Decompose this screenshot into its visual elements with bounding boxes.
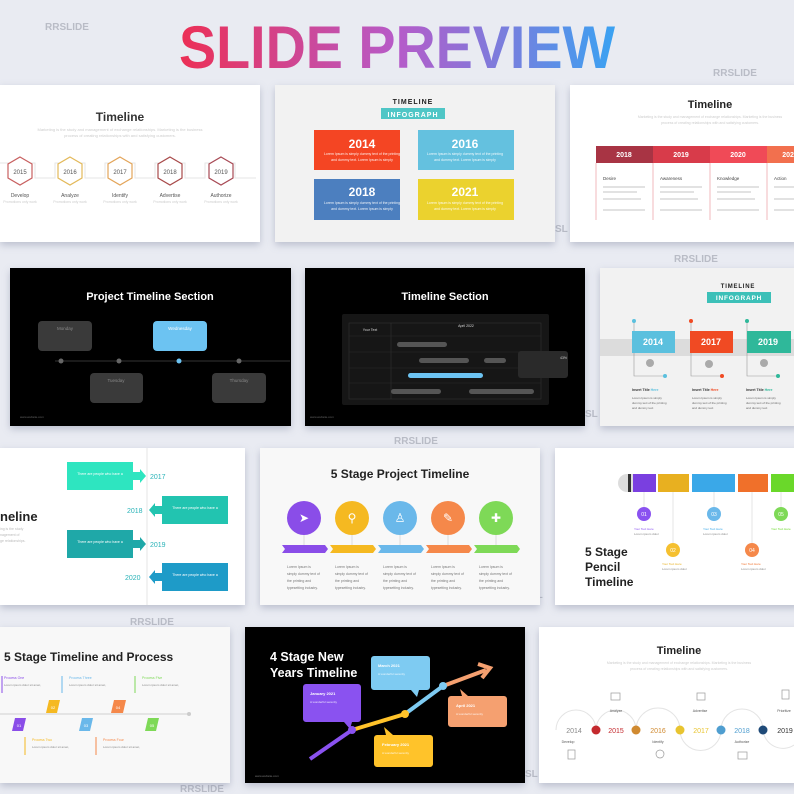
slide 2: colored year boxes: and dummy text. Lorem Ipsum is simply <box>331 158 393 162</box>
slide 8: 5 stage project timeline: ✎ <box>443 511 453 525</box>
slide 11: 4 stage new years timeline (dark): April 2021 <box>456 703 476 708</box>
slide 10: 5 stage timeline and process: Process Four <box>103 738 125 742</box>
slide 6: infograph with pins: 2017 <box>701 337 721 347</box>
slide 12: wave timeline: 2016 <box>650 728 666 735</box>
slide 10: 5 stage timeline and process: Process One <box>4 676 24 680</box>
slide 5: gantt timeline section (dark) <box>305 268 585 426</box>
watermarks: SL <box>585 409 598 420</box>
slide 1: hexagon timeline: 2019 <box>214 170 228 176</box>
slide 8: 5 stage project timeline: the printing and <box>479 579 503 583</box>
slide 10: 5 stage timeline and process <box>0 627 230 783</box>
slide 3: table timeline: Desire <box>603 176 617 181</box>
slide 1: hexagon timeline: Promotions only work <box>204 200 238 204</box>
slide 1: hexagon timeline: Promotions only work <box>3 200 37 204</box>
slide 10: 5 stage timeline and process: Process Five <box>142 676 162 680</box>
slide 12: wave timeline: process of creating relationships with and satisfying customers. <box>630 667 728 671</box>
slide 4: project timeline section (dark): Project Timeline Section <box>86 291 214 303</box>
slide 6: infograph with pins: TIMELINE <box>721 284 755 290</box>
slide 10: 5 stage timeline and process: 03 <box>84 723 89 728</box>
slide 8: 5 stage project timeline: simply dummy text of <box>479 572 512 576</box>
slide 8: 5 stage project timeline: the printing and <box>431 579 455 583</box>
slide 12: wave timeline: Prioritize <box>777 709 791 713</box>
slide 10: 5 stage timeline and process: Lorem ipsum dolor sit amet, <box>32 745 69 749</box>
slide 2: colored year boxes: Lorem Ipsum is simply dummy text of the printing <box>427 152 503 156</box>
watermarks: RRSLIDE <box>674 254 718 265</box>
slide 8: 5 stage project timeline: typesetting industry. <box>383 586 414 590</box>
slide 11: 4 stage new years timeline (dark): A wonderful serenity <box>310 700 338 704</box>
slide 11: 4 stage new years timeline (dark): A wonderful serenity <box>382 751 410 755</box>
slide 2: colored year boxes: 2018 <box>349 185 376 199</box>
slide 12: wave timeline: Timeline <box>657 645 701 657</box>
slide 1: hexagon timeline: 2017 <box>113 170 127 176</box>
slide 10: 5 stage timeline and process: 04 <box>116 705 121 710</box>
slide 8: 5 stage project timeline: simply dummy text of <box>335 572 368 576</box>
watermarks: SL <box>555 224 568 235</box>
slide 8: 5 stage project timeline: Lorem Ipsum is <box>383 565 407 569</box>
slide 12: wave timeline: 2015 <box>608 728 624 735</box>
slide 1: hexagon timeline: 2015 <box>13 170 27 176</box>
slide 1: hexagon timeline: 2018 <box>163 170 177 176</box>
slide 12: wave timeline: Identify <box>652 740 664 744</box>
slide 5: gantt timeline section (dark): 43% <box>560 356 567 360</box>
slide 11: 4 stage new years timeline (dark) <box>245 627 525 783</box>
slide 8: 5 stage project timeline: the printing and <box>383 579 407 583</box>
slide 12: wave timeline: 2014 <box>566 728 582 735</box>
slide 1: hexagon timeline: 2016 <box>63 170 77 176</box>
slide 9: pencil timeline: Your Text Here <box>771 527 791 531</box>
slide 8: 5 stage project timeline: simply dummy text of <box>287 572 320 576</box>
slide 10: 5 stage timeline and process: Lorem ipsum dolor sit amet, <box>69 683 106 687</box>
slide 2: colored year boxes: Lorem Ipsum is simply dummy text of the printing <box>324 201 400 205</box>
slide 7: arrow year timeline: ge relationships. <box>0 539 26 543</box>
slide 11: 4 stage new years timeline (dark): January 2021 <box>310 691 336 696</box>
slide 6: infograph with pins: Lorem Ipsum is simply <box>746 396 776 400</box>
slide 12: wave timeline: Advertise <box>693 709 707 713</box>
slide 1: hexagon timeline <box>0 85 260 242</box>
slide 1: hexagon timeline: Identify <box>112 193 129 199</box>
slide 3: table timeline: Timeline <box>688 99 732 111</box>
slide 9: pencil timeline: Lorem ipsum dolor <box>703 532 728 536</box>
slide 6: infograph with pins: and dummy text <box>746 406 768 410</box>
slide 9: pencil timeline: Pencil <box>585 560 620 574</box>
slide 9: pencil timeline: Lorem ipsum dolor <box>741 567 766 571</box>
slide 8: 5 stage project timeline: ♙ <box>395 511 405 525</box>
slide 7: arrow year timeline: There are people who have a <box>77 472 123 476</box>
slide 11: 4 stage new years timeline (dark): 4 Stage New <box>270 650 344 664</box>
slide 10: 5 stage timeline and process: 5 Stage Timeline and Process <box>4 650 174 664</box>
slide 2: colored year boxes: and dummy text. Lorem Ipsum is simply <box>434 158 496 162</box>
slide 2: colored year boxes: Lorem Ipsum is simply dummy text of the printing <box>324 152 400 156</box>
slide 11: 4 stage new years timeline (dark): Years Timeline <box>270 666 357 680</box>
slide 11: 4 stage new years timeline (dark): A wonderful serenity <box>456 712 484 716</box>
slide 4: project timeline section (dark) <box>10 268 291 426</box>
slide 9: pencil timeline: 02 <box>670 548 676 554</box>
slide 9: pencil timeline: Your Text Here <box>634 527 654 531</box>
slide 4: project timeline section (dark): Tuesday <box>107 378 125 383</box>
slide 12: wave timeline <box>539 627 794 783</box>
slide 6: infograph with pins: Insert Title Here <box>746 388 772 392</box>
slide 6: infograph with pins: dummy text of the printing <box>692 401 727 405</box>
slide 9: pencil timeline: 05 <box>778 512 784 518</box>
slide 1: hexagon timeline: Marketing is the study and management of exchange relationships. Marketing is the business <box>38 127 202 132</box>
slide 8: 5 stage project timeline: ➤ <box>299 511 309 525</box>
slide 8: 5 stage project timeline: ⚲ <box>348 511 356 525</box>
slide 6: infograph with pins: Lorem Ipsum is simply <box>692 396 722 400</box>
slide 10: 5 stage timeline and process: Lorem ipsum dolor sit amet, <box>4 683 41 687</box>
slide 9: pencil timeline: 03 <box>711 512 717 518</box>
slide 6: infograph with pins: dummy text of the printing <box>632 401 667 405</box>
slide 2: colored year boxes: TIMELINE <box>393 99 433 106</box>
slide 8: 5 stage project timeline: typesetting industry. <box>479 586 510 590</box>
slide 3: table timeline: Marketing is the study and management of exchange relationships. Marketing is the business <box>638 115 782 119</box>
slide 12: wave timeline: Authorize <box>735 740 749 744</box>
slide 9: pencil timeline: Your Text Here <box>662 562 682 566</box>
slide 3: table timeline <box>570 85 794 242</box>
slide 1: hexagon timeline: Analyze <box>61 193 79 199</box>
slide 10: 5 stage timeline and process: Process Two <box>32 738 52 742</box>
slide 6: infograph with pins: and dummy text <box>692 406 714 410</box>
slide 2: colored year boxes <box>275 85 555 242</box>
slide 3: table timeline: process of creating relationships with and satisfying customers. <box>661 121 759 125</box>
slide 10: 5 stage timeline and process: 01 <box>17 723 22 728</box>
slide 4: project timeline section (dark): www.website.com <box>20 415 44 419</box>
watermarks: RRSLIDE <box>130 617 174 628</box>
slide 8: 5 stage project timeline: simply dummy text of <box>383 572 416 576</box>
slide 2: colored year boxes: 2021 <box>452 185 479 199</box>
slide 12: wave timeline: 2018 <box>734 728 750 735</box>
slide 3: table timeline: Knowledge <box>717 176 740 181</box>
slide 3: table timeline: 2019 <box>673 152 689 159</box>
slide 1: hexagon timeline: Authorize <box>210 193 232 199</box>
slide 5: gantt timeline section (dark): www.website.com <box>310 415 334 419</box>
slide 2: colored year boxes: and dummy text. Lorem Ipsum is simply <box>331 207 393 211</box>
slide 6: infograph with pins: dummy text of the printing <box>746 401 781 405</box>
slide 11: 4 stage new years timeline (dark): February 2021 <box>382 742 410 747</box>
slide 10: 5 stage timeline and process: Process Three <box>69 676 92 680</box>
slide 5: gantt timeline section (dark): Timeline Section <box>401 291 489 303</box>
slide 7: arrow year timeline: There are people who have a <box>77 540 123 544</box>
watermarks: RRSLIDE <box>394 436 438 447</box>
slide 7: arrow year timeline: ing is the study <box>0 527 24 531</box>
slide 2: colored year boxes: Lorem Ipsum is simply dummy text of the printing <box>427 201 503 205</box>
slide 1: hexagon timeline: Advertise <box>160 193 181 199</box>
watermarks: SL <box>530 590 543 601</box>
slide 12: wave timeline: Analyze <box>610 709 622 713</box>
slide 11: 4 stage new years timeline (dark): March 2021 <box>378 663 401 668</box>
slide 9: pencil timeline: Lorem ipsum dolor <box>662 567 687 571</box>
slide 3: table timeline: 2020 <box>730 152 746 159</box>
slide 8: 5 stage project timeline: the printing and <box>335 579 359 583</box>
slide 7: arrow year timeline: 2017 <box>150 474 166 481</box>
slide 5: gantt timeline section (dark): Your Text <box>363 328 377 332</box>
slide 8: 5 stage project timeline: Lorem Ipsum is <box>335 565 359 569</box>
slide 3: table timeline: Awareness <box>660 176 683 181</box>
slide 1: hexagon timeline: Timeline <box>96 110 145 124</box>
slide 1: hexagon timeline: Promotions only work <box>103 200 137 204</box>
slide 8: 5 stage project timeline: Lorem Ipsum is <box>287 565 311 569</box>
slide 8: 5 stage project timeline: typesetting industry. <box>431 586 462 590</box>
slide 9: pencil timeline: 04 <box>749 548 755 554</box>
slide 10: 5 stage timeline and process: 02 <box>51 705 56 710</box>
slide 1: hexagon timeline: Develop <box>11 193 29 199</box>
slide 11: 4 stage new years timeline (dark): www.website.com <box>255 774 279 778</box>
slide 3: table timeline: 2018 <box>616 152 632 159</box>
slide 1: hexagon timeline: Promotions only work <box>153 200 187 204</box>
title: SLIDE PREVIEW <box>179 14 615 81</box>
slide 9: pencil timeline <box>555 448 794 605</box>
slide 7: arrow year timeline: There are people who have a <box>172 573 218 577</box>
slide 8: 5 stage project timeline: 5 Stage Project Timeline <box>331 467 470 481</box>
slide 9: pencil timeline: Your Text Here <box>741 562 761 566</box>
slide 9: pencil timeline: Lorem ipsum dolor <box>634 532 659 536</box>
slide 8: 5 stage project timeline: typesetting industry. <box>335 586 366 590</box>
slide 9: pencil timeline: Your Text Here <box>703 527 723 531</box>
slide 1: hexagon timeline: process of creating relationships with and satisfying customers. <box>64 133 176 138</box>
slide 6: infograph with pins: and dummy text <box>632 406 654 410</box>
slide 1: hexagon timeline: Promotions only work <box>53 200 87 204</box>
slide 2: colored year boxes: and dummy text. Lorem Ipsum is simply <box>434 207 496 211</box>
slide 4: project timeline section (dark): Thursday <box>230 378 249 383</box>
slide 7: arrow year timeline: 2018 <box>127 508 143 515</box>
slide 5: gantt timeline section (dark): April 2022 <box>458 324 474 328</box>
slide 2: colored year boxes: INFOGRAPH <box>388 112 438 119</box>
slide 9: pencil timeline: Timeline <box>585 575 634 589</box>
slide 10: 5 stage timeline and process: 05 <box>150 723 155 728</box>
slide 7: arrow year timeline: 2019 <box>150 542 166 549</box>
slide 8: 5 stage project timeline: Lorem Ipsum is <box>431 565 455 569</box>
slide 4: project timeline section (dark): Monday <box>57 326 74 331</box>
slide 8: 5 stage project timeline: the printing and <box>287 579 311 583</box>
slide 6: infograph with pins: INFOGRAPH <box>716 295 762 302</box>
slide 3: table timeline: Action <box>774 176 787 181</box>
slide 10: 5 stage timeline and process: Lorem ipsum dolor sit amet, <box>103 745 140 749</box>
slide 7: arrow year timeline: There are people who have a <box>172 506 218 510</box>
slide 2: colored year boxes: 2014 <box>349 137 376 151</box>
slide 6: infograph with pins <box>600 268 794 426</box>
slide 6: infograph with pins: 2019 <box>758 337 778 347</box>
slide 8: 5 stage project timeline: simply dummy text of <box>431 572 464 576</box>
slide 9: pencil timeline: 01 <box>641 512 647 518</box>
slide 12: wave timeline: 2019 <box>777 728 793 735</box>
slide 7: arrow year timeline: neline <box>0 509 38 524</box>
slide 7: arrow year timeline: nagement of <box>0 533 19 537</box>
slide 12: wave timeline: Marketing is the study and management of exchange relationships. Marketing is the business <box>607 661 751 665</box>
slide 11: 4 stage new years timeline (dark): A wonderful serenity <box>378 672 406 676</box>
slide 2: colored year boxes: 2016 <box>452 137 479 151</box>
slide 6: infograph with pins: Insert Title Here <box>692 388 718 392</box>
watermarks: RRSLIDE <box>45 22 89 33</box>
slide 8: 5 stage project timeline: ✚ <box>491 511 501 525</box>
slide 8: 5 stage project timeline: Lorem Ipsum is <box>479 565 503 569</box>
slide 6: infograph with pins: Insert Title Here <box>632 388 658 392</box>
slide 8: 5 stage project timeline: typesetting industry. <box>287 586 318 590</box>
slide 4: project timeline section (dark): Wednesday <box>168 326 193 331</box>
slide 12: wave timeline: Develop <box>562 740 574 744</box>
slide 12: wave timeline: 2017 <box>693 728 709 735</box>
slide 8: 5 stage project timeline <box>260 448 540 605</box>
slide 7: arrow year timeline: 2020 <box>125 575 141 582</box>
slide 10: 5 stage timeline and process: Lorem ipsum dolor sit amet, <box>142 683 179 687</box>
slide 6: infograph with pins: Lorem Ipsum is simply <box>632 396 662 400</box>
slide 6: infograph with pins: 2014 <box>643 337 663 347</box>
watermarks: RRSLIDE <box>713 68 757 79</box>
slide 9: pencil timeline: 5 Stage <box>585 545 628 559</box>
watermarks: SL <box>525 769 538 780</box>
slide 7: arrow year timeline <box>0 448 245 605</box>
